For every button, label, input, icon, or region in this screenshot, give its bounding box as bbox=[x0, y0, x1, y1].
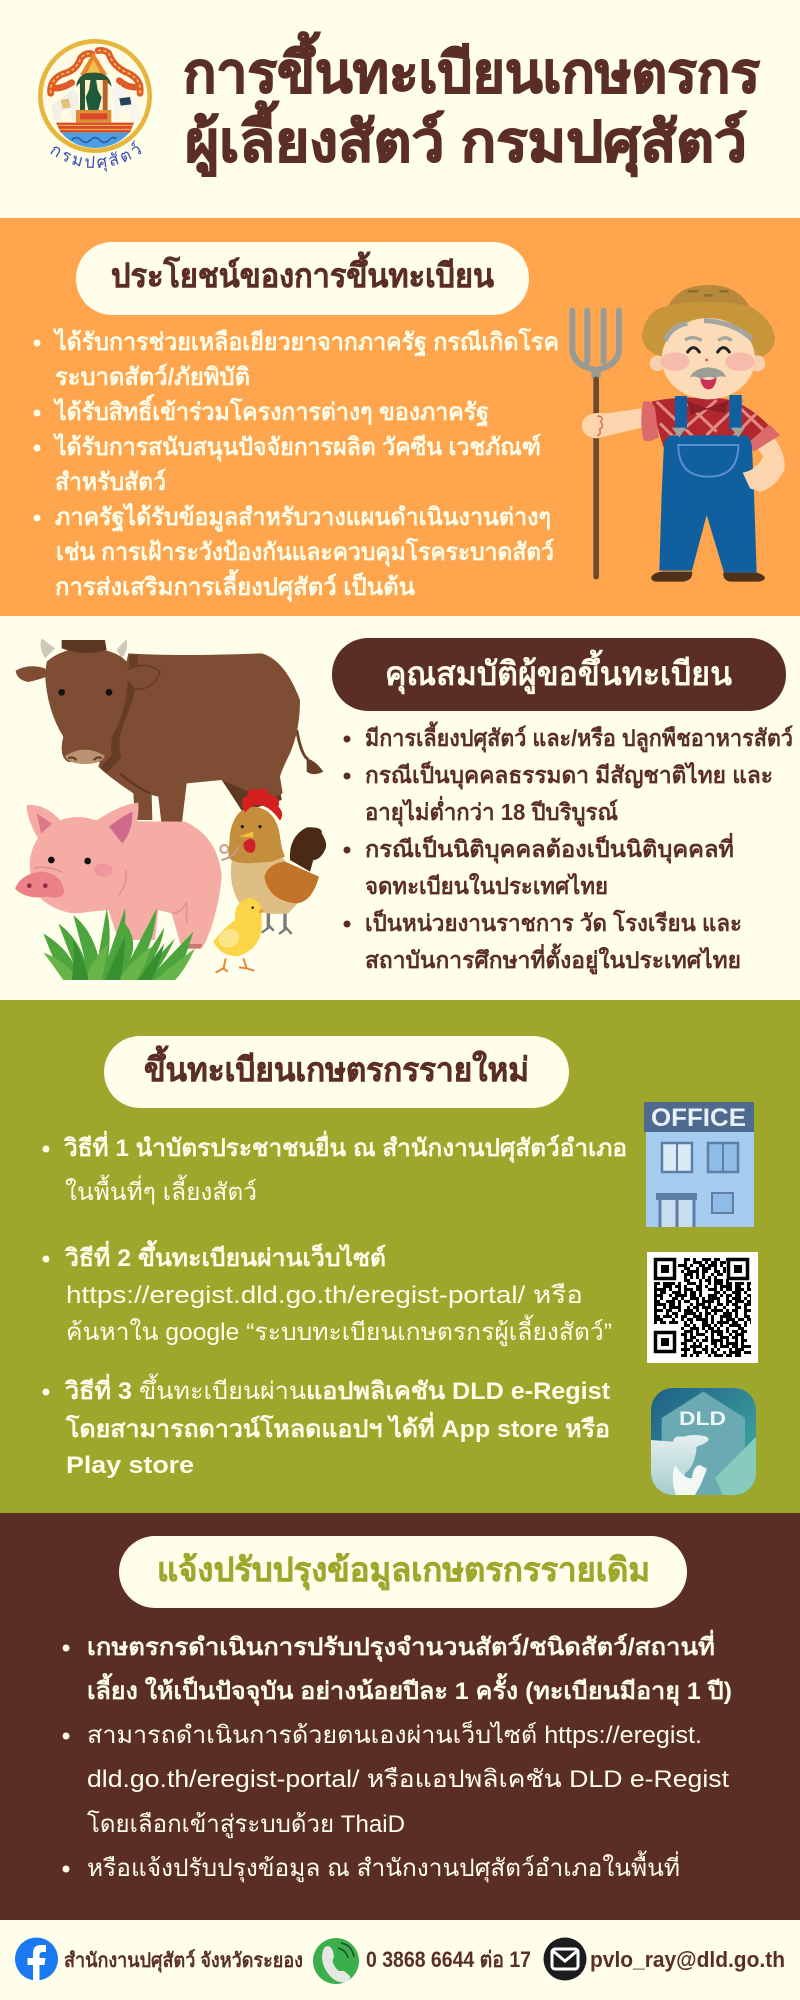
panel: update information bbox=[0, 1513, 800, 1920]
icon: cow bbox=[16, 638, 323, 825]
text: phone number: 0 3868 6644 ต่อ 17 bbox=[366, 1947, 531, 1972]
icon: DLD app: DLD bbox=[679, 1409, 726, 1430]
text block: method 2 bbox=[42, 1239, 612, 1347]
panel: qualifications bbox=[0, 616, 800, 1000]
text block: benefits list: ได้รับการช่วยเหลือเยียวยาจากภาครัฐ กรณีเกิดโรค bbox=[52, 327, 559, 358]
heading: benefits pill: ประโยชน์ของการขึ้นทะเบียน bbox=[111, 251, 494, 294]
text: logo caption: กรมปศุสัตว์ bbox=[50, 140, 142, 172]
text block: method 2: วิธีที่ 2 ขึ้นทะเบียนผ่านเว็บไซต์ bbox=[64, 1239, 386, 1272]
text block: update list: หรือแจ้งปรับปรุงข้อมูล ณ สำนักงานปศุสัตว์อำเภอในพื้นที่ bbox=[87, 1850, 680, 1883]
icon: chick bbox=[213, 898, 265, 973]
text block: update list: เลี้ยง ให้เป็นปัจจุบัน อย่างน้อยปีละ 1 ครั้ง (ทะเบียนมีอายุ 1 ปี) bbox=[87, 1672, 732, 1707]
text block: benefits list: เช่น การเฝ้าระวังป้องกันและควบคุมโรคระบาดสัตว์ bbox=[56, 537, 554, 568]
icon: phone bbox=[313, 1938, 359, 1984]
text block: method 3: Play store bbox=[66, 1452, 194, 1479]
text block: qualifications list: เป็นหน่วยงานราชการ วัด โรงเรียน และ bbox=[365, 908, 742, 936]
text block: update list: สามารถดำเนินการด้วยตนเองผ่านเว็บไซต์ https://eregist. bbox=[87, 1720, 702, 1749]
icon: QR code bbox=[647, 1252, 758, 1363]
icon: farmer with pitchfork bbox=[572, 285, 785, 582]
group: farm animals bbox=[15, 638, 326, 980]
title: ผู้เลี้ยงสัตว์ กรมปศุสัตว์ bbox=[185, 101, 747, 177]
text block: method 2: https://eregist.dld.go.th/eregist-portal/ หรือ bbox=[66, 1282, 583, 1309]
icon: email bbox=[544, 1938, 586, 1980]
text block: qualifications list: อายุไม่ต่ำกว่า 18 ปีบริบูรณ์ bbox=[365, 795, 618, 827]
heading: update pill bbox=[119, 1536, 687, 1608]
icon: DLD app bbox=[651, 1388, 756, 1495]
text block: method 3: โดยสามารถดาวน์โหลดแอปฯ ได้ที่ App store หรือ bbox=[65, 1411, 610, 1443]
heading: new registration pill bbox=[104, 1036, 569, 1108]
text block: method 3: วิธีที่ 3 ขึ้นทะเบียนผ่าน แอปพลิเคชัน DLD e-Regist bbox=[64, 1373, 610, 1405]
text: facebook page: สำนักงานปศุสัตว์ จังหวัดระยอง bbox=[64, 1949, 303, 1973]
icon: grass bbox=[43, 908, 195, 980]
heading: new registration pill: ขึ้นทะเบียนเกษตรกรรายใหม่ bbox=[144, 1045, 529, 1088]
text block: update list: dld.go.th/eregist-portal/ หรือแอปพลิเคชัน DLD e-Regist bbox=[87, 1766, 729, 1793]
pitchfork bbox=[572, 311, 619, 579]
text block: method 3 bbox=[42, 1373, 610, 1479]
text block: update list bbox=[62, 1629, 732, 1883]
heading: benefits pill bbox=[76, 242, 529, 315]
title: การขึ้นทะเบียนเกษตรกร bbox=[183, 32, 760, 104]
text block: method 2: ค้นหาใน google “ระบบทะเบียนเกษตรกรผู้เลี้ยงสัตว์” bbox=[66, 1314, 612, 1347]
icon: office building bbox=[644, 1102, 754, 1227]
heading: qualifications pill bbox=[332, 638, 786, 711]
text block: qualifications list bbox=[344, 721, 793, 975]
text block: benefits list: การส่งเสริมการเลี้ยงปศุสัตว์ เป็นต้น bbox=[55, 568, 416, 603]
text block: benefits list bbox=[34, 327, 559, 603]
text block: method 1: ในพื้นที่ๆ เลี้ยงสัตว์ bbox=[65, 1174, 257, 1206]
icon: office building: OFFICE bbox=[651, 1104, 746, 1132]
text block: update list: โดยเลือกเข้าสู่ระบบด้วย ThaiD bbox=[87, 1810, 405, 1839]
panel: new registration bbox=[0, 1000, 800, 1513]
text block: update list: เกษตรกรดำเนินการปรับปรุงจำนวนสัตว์/ชนิดสัตว์/สถานที่ bbox=[87, 1629, 715, 1663]
icon: department of livestock logo bbox=[38, 39, 152, 172]
text block: qualifications list: กรณีเป็นนิติบุคคลต้องเป็นนิติบุคคลที่ bbox=[365, 832, 734, 864]
icon: pig bbox=[15, 803, 238, 949]
text block: qualifications list: สถาบันการศึกษาที่ตั้งอยู่ในประเทศไทย bbox=[365, 943, 741, 975]
text block: benefits list: ระบาดสัตว์/ภัยพิบัติ bbox=[55, 363, 250, 391]
text block: benefits list: ได้รับสิทธิ์เข้าร่วมโครงการต่างๆ ของภาครัฐ bbox=[52, 394, 489, 428]
text block: method 1 bbox=[42, 1130, 627, 1206]
text block: benefits list: ได้รับการสนับสนุนปัจจัยการผลิต วัคซีน เวชภัณฑ์ bbox=[52, 432, 541, 463]
text block: qualifications list: จดทะเบียนในประเทศไทย bbox=[365, 872, 608, 899]
text: email address: pvlo_ray@dld.go.th bbox=[590, 1947, 785, 1972]
panel: contact footer bbox=[0, 1920, 800, 2000]
text block: qualifications list: กรณีเป็นบุคคลธรรมดา มีสัญชาติไทย และ bbox=[365, 760, 773, 790]
panel: header bbox=[38, 31, 760, 178]
icon: facebook bbox=[15, 1938, 58, 1981]
panel: benefits bbox=[0, 218, 800, 616]
title bbox=[183, 32, 760, 177]
text block: benefits list: ภาครัฐได้รับข้อมูลสำหรับวางแผนดำเนินงานต่างๆ bbox=[55, 502, 551, 533]
heading: update pill: แจ้งปรับปรุงข้อมูลเกษตรกรรายเดิม bbox=[157, 1551, 650, 1591]
heading: qualifications pill: คุณสมบัติผู้ขอขึ้นทะเบียน bbox=[385, 649, 732, 695]
text block: benefits list: สำหรับสัตว์ bbox=[55, 468, 166, 496]
text block: method 1: วิธีที่ 1 นำบัตรประชาชนยื่น ณ สำนักงานปศุสัตว์อำเภอ bbox=[63, 1130, 627, 1164]
icon: chicken bbox=[228, 788, 326, 934]
